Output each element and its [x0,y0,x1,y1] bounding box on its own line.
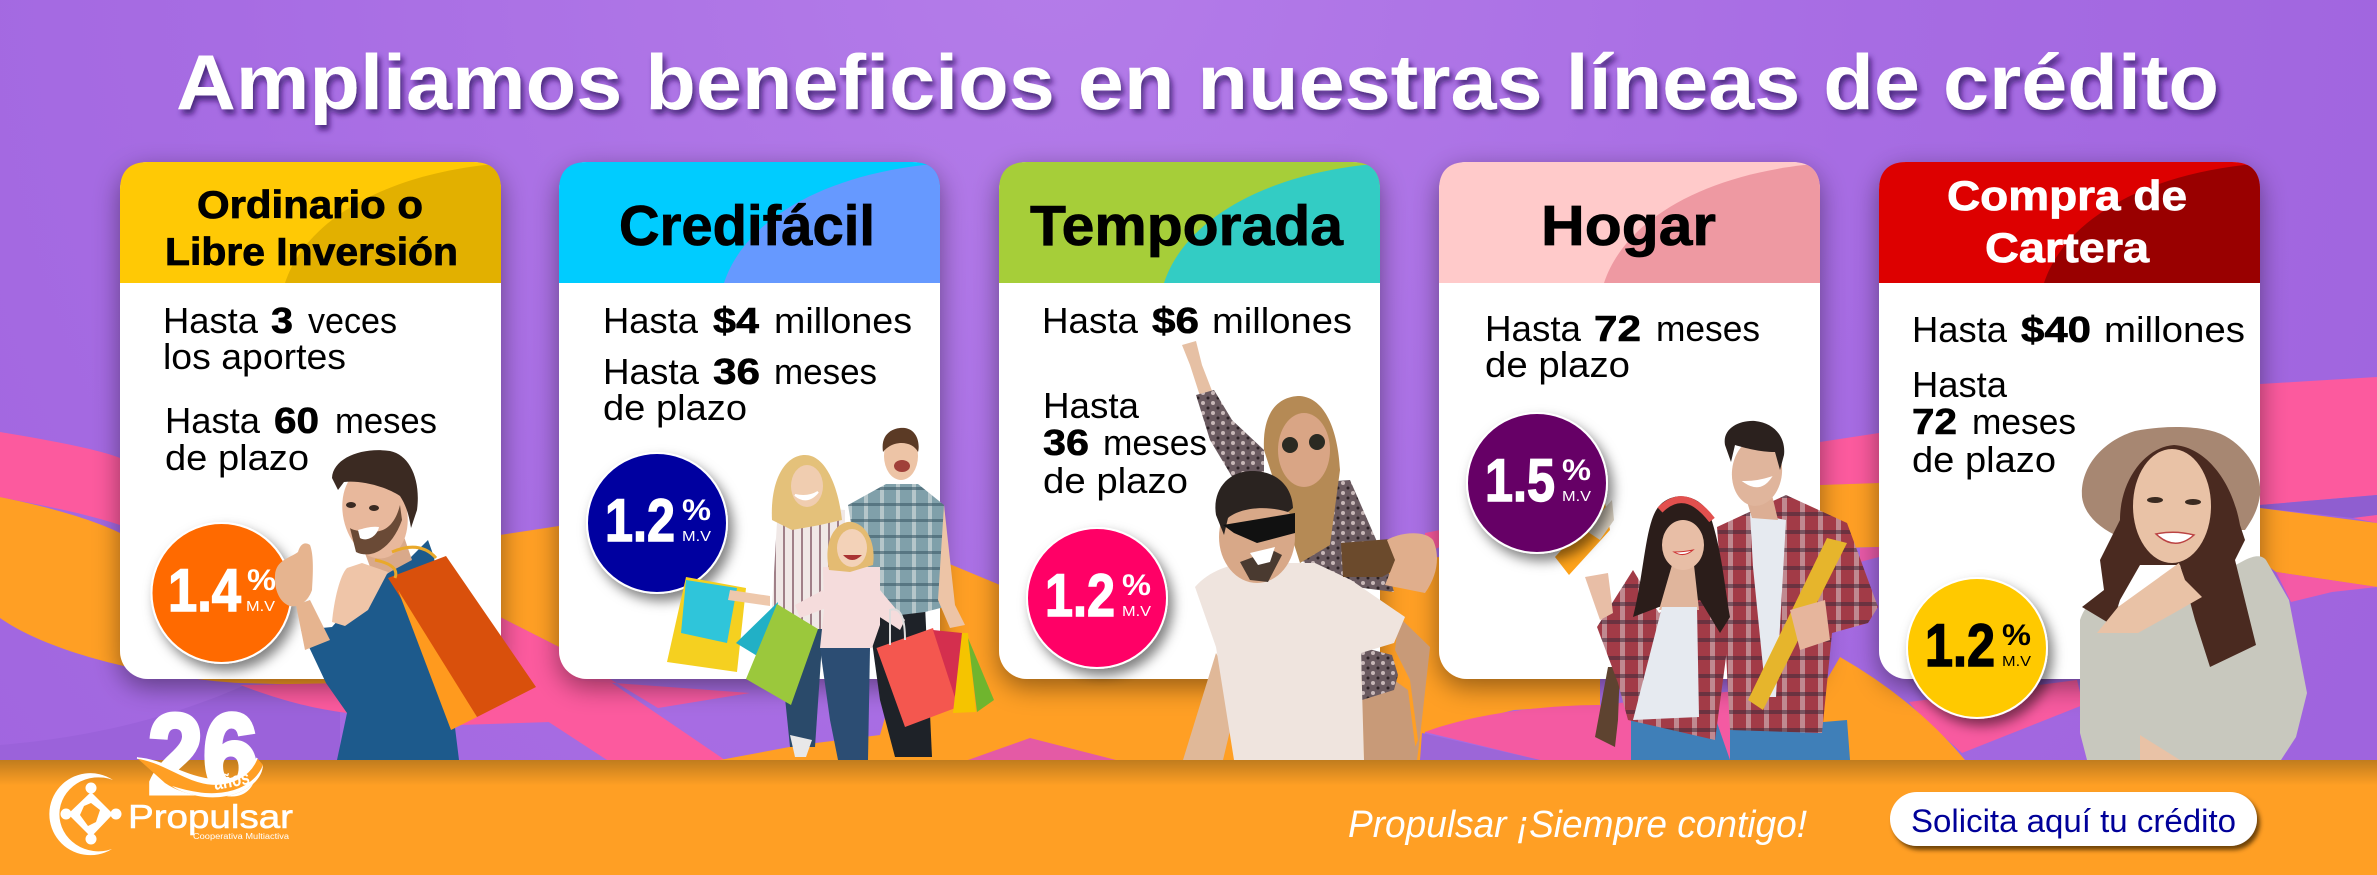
rate badge: 1.2% M.V: 1.2 [605,487,675,554]
heading: Hogar: Hogar [1541,194,1716,258]
rate badge: 1.5% M.V: % [1562,454,1591,487]
rate badge: 1.2% M.V [1027,528,1167,668]
rate badge: 1.4% M.V: % [247,564,276,597]
photo: man with shopping bag [275,450,536,760]
tagline: Cooperativa Multiactiva [193,832,290,841]
benefit text: Hasta 72 meses de plazo: de plazo [1485,344,1630,385]
benefit text: Hasta 36 meses de plazo: Hasta [603,351,700,392]
card header: Compra de Cartera [1879,162,2260,283]
heading: Ordinario o Libre Inversión: Ordinario o [197,184,423,227]
swoosh [137,758,263,797]
benefit text: Hasta 36 meses de plazo: de plazo [1043,460,1188,501]
rate badge: 1.4% M.V [152,523,292,663]
rate badge: 1.2% M.V: 1.2 [1045,562,1115,629]
benefit text: Hasta $6 millones: millones [1212,300,1352,341]
benefit text: Hasta 36 meses de plazo: 36 [1043,422,1089,463]
rate badge: 1.5% M.V [1467,413,1607,553]
button: Solicita aquí tu crédito [1890,792,2257,846]
benefit text: Hasta $4 millones: $4 [713,300,759,341]
photo: couple taking a selfie [1182,341,1437,760]
card header: Temporada [999,162,1380,283]
rate badge: 1.2% M.V: M.V [2002,653,2031,670]
benefit text: Hasta $4 millones: millones [774,300,912,341]
rate badge: 1.2% M.V [1907,578,2047,718]
benefit text: Hasta 36 meses de plazo: de plazo [603,387,747,428]
rate badge: 1.4% M.V: 1.4 [168,557,242,624]
title: Ampliamos beneficios en nuestras líneas de crédito [176,38,2219,126]
wordmark: Propulsar [128,798,293,835]
button: Solicita aquí tu crédito: Solicita aquí tu crédito [1911,803,2236,839]
años label: años [212,767,251,795]
benefit text: Hasta 72 meses de plazo: de plazo [1912,439,2056,480]
benefit text: Hasta $4 millones [603,300,912,341]
benefit text: Hasta $4 millones: Hasta [603,300,699,341]
rate badge: 1.2% M.V: 1.2 [1925,612,1995,679]
heading: Ordinario o Libre Inversión [165,184,458,274]
heading: Compra de Cartera: Cartera [1985,224,2150,271]
benefit text: Hasta 3 veces los aportes: veces [308,300,397,341]
rate badge: 1.5% M.V: M.V [1562,488,1591,505]
card header: Hogar [1439,162,1820,283]
benefit text: Hasta 72 meses de plazo: meses [1972,401,2076,442]
panel: Temporada [999,162,1380,679]
rate badge: 1.2% M.V: % [682,494,711,527]
photo: woman with hat [2080,427,2307,760]
heading: Temporada: Temporada [1030,194,1344,258]
benefit text: Hasta 72 meses de plazo [1912,364,2076,480]
rate badge: 1.2% M.V: M.V [682,528,711,545]
slogan: Propulsar ¡Siempre contigo! [1348,804,1807,846]
card header: Credifácil [559,162,940,283]
benefit text: Hasta 72 meses de plazo [1485,308,1760,385]
icon: Propulsar emblem [49,773,122,855]
benefit text: Hasta 3 veces los aportes [163,300,397,377]
rate badge: 1.2% M.V: % [1122,569,1151,602]
benefit text: Hasta $40 millones [1912,309,2245,350]
benefit text: Hasta 72 meses de plazo: meses [1656,308,1760,349]
footer band [0,760,2377,875]
benefit text: Hasta $40 millones: millones [2104,309,2245,350]
benefit text: Hasta $40 millones: $40 [2021,309,2091,350]
benefit text: Hasta 36 meses de plazo: Hasta [1043,385,1140,426]
rate badge: 1.2% M.V: % [2002,619,2031,652]
benefit text: Hasta $6 millones: $6 [1152,300,1199,341]
benefit text: Hasta 60 meses de plazo: Hasta [165,400,261,441]
icon: paint roller [1555,500,1614,575]
benefit text: Hasta $40 millones: Hasta [1912,309,2008,350]
panel: Ordinario o Libre Inversión [120,162,501,679]
benefit text: Hasta 3 veces los aportes: Hasta [163,300,259,341]
benefit text: Hasta 60 meses de plazo: 60 [274,400,319,441]
logo: 26 años Propulsar [49,691,293,855]
rate badge: 1.2% M.V: M.V [1122,603,1151,620]
benefit text: Hasta 3 veces los aportes: los aportes [163,336,346,377]
heading: Ordinario o Libre Inversión: Libre Inversión [165,231,458,274]
anniversary number 26: 26 [148,691,258,817]
panel: Compra de Cartera [1879,162,2260,718]
benefit text: Hasta 72 meses de plazo: 72 [1594,308,1641,349]
benefit text: Hasta 36 meses de plazo [1043,385,1207,501]
benefit text: Hasta 72 meses de plazo: 72 [1912,401,1957,442]
panel: Credifácil [559,162,940,679]
benefit text: Hasta $6 millones: Hasta [1042,300,1139,341]
benefit text: Hasta 60 meses de plazo: de plazo [165,437,309,478]
heading: Credifácil: Credifácil [619,194,875,258]
benefit text: Hasta 60 meses de plazo: meses [335,400,437,441]
rate badge: 1.2% M.V [587,453,727,593]
heading: Compra de Cartera [1947,172,2187,271]
benefit text: Hasta 36 meses de plazo: meses [774,351,877,392]
benefit text: Hasta $6 millones [1042,300,1352,341]
rate badge: 1.5% M.V: 1.5 [1485,447,1555,514]
heading: Compra de Cartera: Compra de [1947,172,2187,219]
benefit text: Hasta 36 meses de plazo [603,351,877,428]
benefit text: Hasta 72 meses de plazo: Hasta [1912,364,2008,405]
rate badge: 1.4% M.V: M.V [246,598,275,615]
card header: Ordinario [120,162,501,283]
photo: couple with tools [1585,421,1878,760]
benefit text: Hasta 72 meses de plazo: Hasta [1485,308,1582,349]
benefit text: Hasta 36 meses de plazo: meses [1103,422,1207,463]
panel: Hogar [1439,162,1820,679]
benefit text: Hasta 60 meses de plazo [165,400,437,478]
benefit text: Hasta 36 meses de plazo: 36 [713,351,760,392]
benefit text: Hasta 3 veces los aportes: 3 [271,300,293,341]
photo: family with shopping bags [667,428,994,760]
